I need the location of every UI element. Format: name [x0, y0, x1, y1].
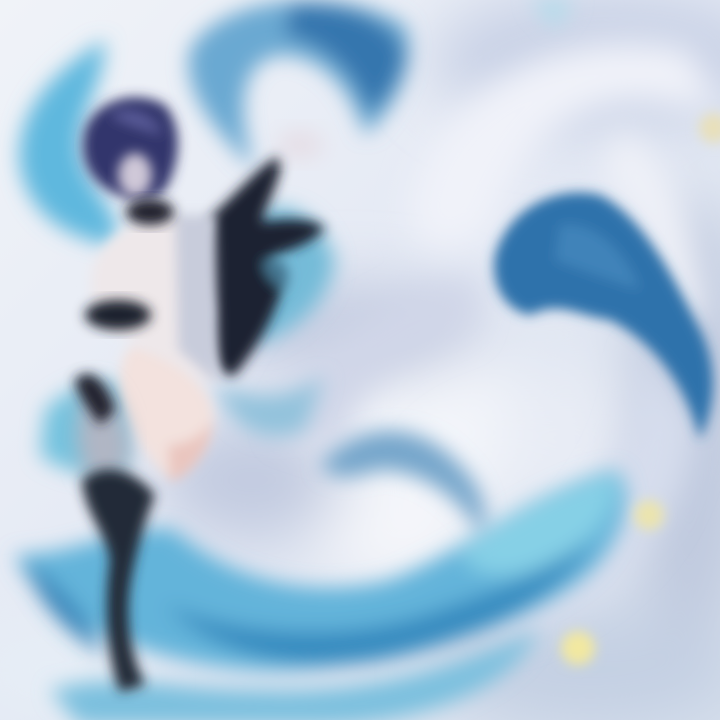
face: [118, 153, 152, 197]
large dark blue wave right: [494, 192, 713, 440]
middle blue tail: [215, 375, 486, 540]
white swirl cloud right: [280, 43, 720, 640]
top blue swirl: [189, 0, 575, 170]
black sleeve and flowing fabric: [207, 155, 325, 376]
left cyan splash: [20, 40, 130, 474]
black thigh strap: [75, 374, 115, 425]
pale raised hand: [276, 129, 324, 161]
bottom cyan wave: [15, 470, 626, 720]
torso: [91, 215, 218, 385]
black top: [85, 300, 151, 330]
black boots: [82, 469, 155, 692]
hair: [83, 97, 178, 199]
figure: anime character: [75, 97, 335, 692]
cyan water behind figure: [245, 207, 335, 345]
lower garment: [77, 383, 131, 483]
collar: [126, 199, 174, 225]
legs: [120, 345, 214, 482]
golden light dots: [561, 113, 720, 665]
